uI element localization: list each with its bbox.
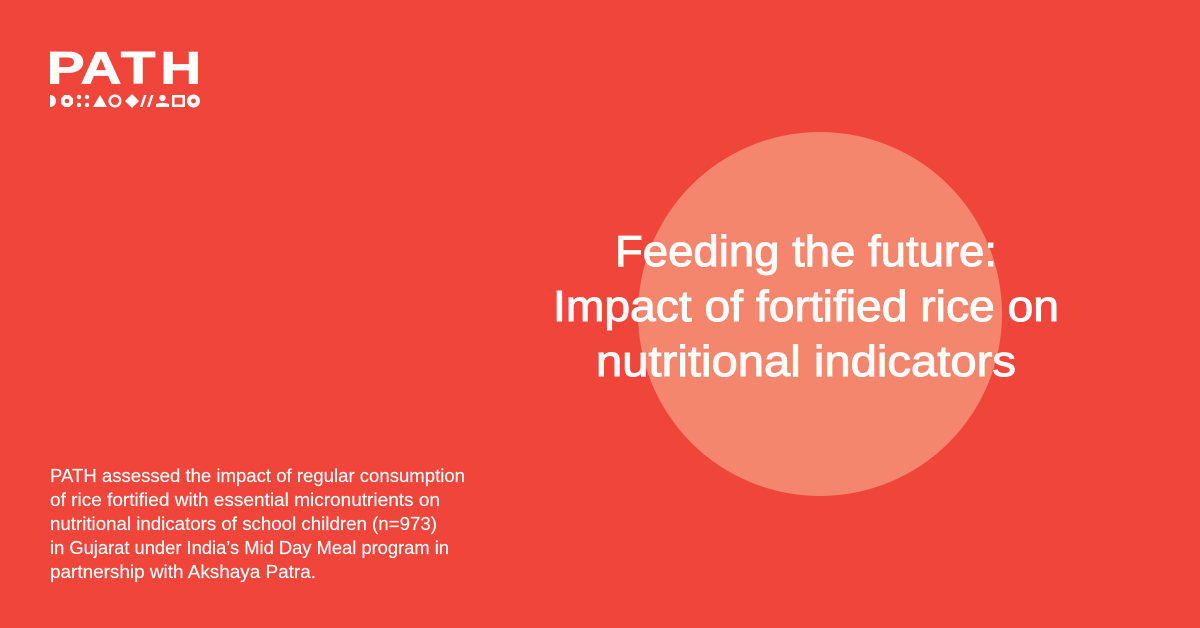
description text block: of rice fortified with essential micronutrients on: [50, 489, 440, 510]
title: Feeding the future:: [615, 227, 997, 276]
description text block: PATH assessed the impact of regular consumption: [50, 465, 465, 486]
title: Impact of fortified rice on: [553, 282, 1059, 331]
description text block: in Gujarat under India’s Mid Day Meal program in: [50, 537, 449, 558]
logo: PATH: [47, 42, 201, 108]
description text block: [50, 465, 465, 582]
title: nutritional indicators: [596, 337, 1016, 386]
logo symbol row: [50, 94, 200, 108]
decorative circle: [638, 132, 1002, 496]
description text block: nutritional indicators of school children (n=973): [50, 513, 437, 534]
title: [553, 227, 1059, 386]
description text block: partnership with Akshaya Patra.: [50, 561, 316, 582]
logo wordmark: PATH: [47, 42, 201, 93]
